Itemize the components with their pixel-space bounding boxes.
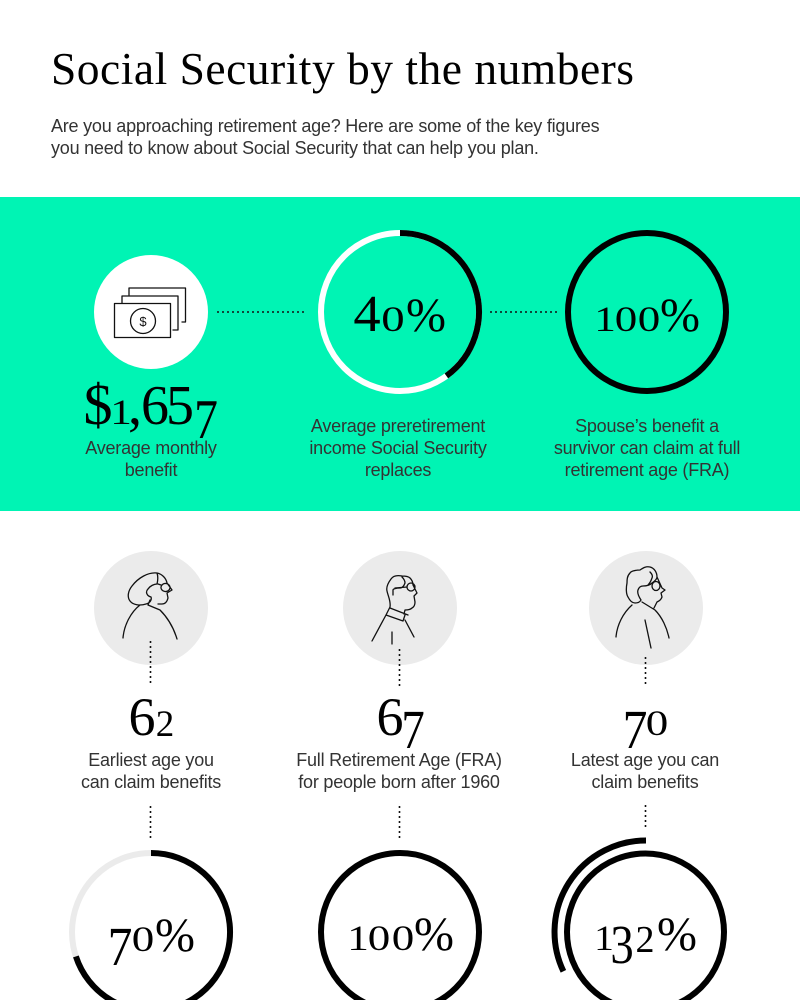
intro text [51,116,600,158]
chart: 100% ring: 1 [594,299,616,339]
connector [398,649,400,686]
column: age 70 [555,551,724,1000]
label: average monthly benefit: Average monthly [85,438,217,458]
connector [398,806,400,838]
label: for people born after 1960 [298,772,500,792]
label: preretirement income: replaces [365,460,431,480]
chart: 100% ring: 0 [392,918,414,958]
label: preretirement income: income Social Security [309,438,487,458]
chart: 132% rings [555,840,724,1000]
number 67 [376,687,425,761]
label: Latest age you can [571,750,719,770]
label: preretirement income [309,416,487,480]
connector [150,806,152,838]
label: average monthly benefit [85,438,217,480]
stat: $1,657: $ [84,372,112,437]
chart: 100% ring: 1 [347,918,369,958]
chart: 70% ring: 0 [132,919,154,959]
label [571,750,719,792]
stat: $1,657: 7 [194,390,218,451]
label: spouse's benefit: Spouse’s benefit a [575,416,720,436]
stat: $1,657: 5 [166,375,194,437]
number 62 [128,687,174,747]
chart: 100% ring [568,233,726,391]
chart: 100% ring [321,853,479,1000]
number 70: 7 [623,700,647,761]
number 62: 2 [156,704,174,745]
stat: $1,657: 6 [141,375,169,437]
label: spouse's benefit: retirement age (FRA) [565,460,729,480]
label: Full Retirement Age (FRA) [296,750,502,770]
label: spouse's benefit [554,416,740,480]
icon: woman with curly hair [589,551,703,665]
number 67: 7 [401,701,425,761]
number 62: 6 [128,687,156,747]
number 67: 6 [376,687,404,747]
stat: $1,657: 1 [110,392,132,432]
connector [644,657,646,686]
label: average monthly benefit: benefit [125,460,177,480]
column: age 62 [72,551,230,1000]
chart: 40% ring: 4 [353,284,381,343]
connector [150,641,152,686]
intro text: you need to know about Social Security that can help you plan. [51,138,539,158]
stat: $1,657: , [128,375,142,437]
chart: 70% ring: % [155,909,195,962]
icon: money in white circle: $ [139,314,147,329]
label: claim benefits [592,772,699,792]
stat: $1,657 [84,372,218,451]
chart: 100% ring: 0 [368,918,390,958]
connector: 40% to 100% [490,311,558,313]
icon: man with glasses and collar [343,551,457,665]
label [81,750,221,792]
label: Earliest age you [88,750,214,770]
column: age 67 [296,551,502,1000]
chart: 100% ring: 0 [615,299,637,339]
chart: 70% ring [72,853,230,1000]
chart: 40% ring [321,233,479,391]
title: Social Security by the numbers [51,43,634,94]
chart: 100% ring: 0 [638,299,660,339]
connector [644,805,646,827]
label: can claim benefits [81,772,221,792]
chart: 100% ring: % [414,908,454,961]
connector: money to 40% [217,311,306,313]
chart: 132% rings: 2 [636,919,654,961]
chart: 100% ring: % [660,289,700,342]
chart: 132% rings: % [657,908,697,961]
number 70 [623,700,668,761]
chart: 132% rings: 1 [594,919,614,959]
label: preretirement income: Average preretirement [311,416,485,436]
number 70: 0 [646,703,668,743]
chart: 40% ring: % [406,289,446,342]
chart: 40% ring: 0 [381,300,405,340]
panel: green key figures band [0,197,800,511]
intro text: Are you approaching retirement age? Here are some of the key figures [51,116,600,136]
chart: 70% ring: 7 [108,917,132,978]
label: spouse's benefit: survivor can claim at full [554,438,740,458]
icon: woman with short hair [94,551,208,665]
icon: money in white circle [94,255,208,369]
chart: 132% rings: 3 [610,916,634,976]
label [296,750,502,792]
